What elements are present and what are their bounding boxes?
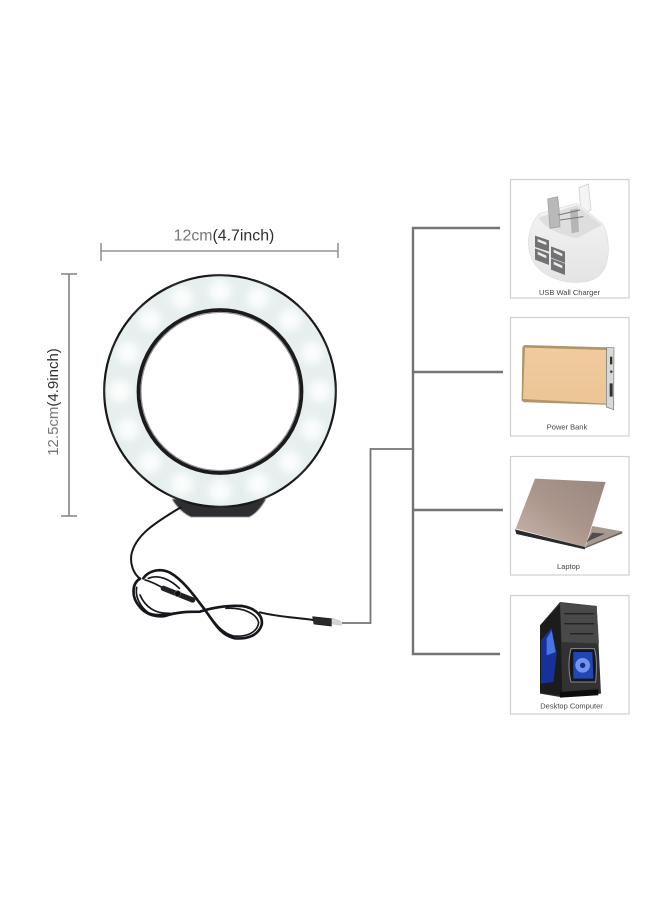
ring light [104,275,336,517]
panel: Laptop [510,456,629,575]
USB plug [313,617,341,626]
label: Laptop [557,562,580,571]
dimension: width 12cm [101,228,338,261]
label: Power Bank [547,422,587,432]
panel: USB Wall Charger [510,180,629,298]
dimension: height 12.5cm: 12.5cm(4.9inch) [45,348,62,456]
ring light base [172,499,266,517]
ring light body [104,275,336,507]
inner ring rim [138,310,302,473]
icon: wall charger [528,184,608,282]
dimension: height 12.5cm [45,274,77,516]
label: Desktop Computer [540,702,603,710]
icon: laptop [515,479,622,549]
panel: Power Bank [510,318,629,436]
LED glow spots [109,280,331,502]
icon: desktop computer tower [540,602,601,698]
inline switch [163,588,193,600]
cable with inline switch and USB plug [131,507,341,638]
label: USB Wall Charger [539,288,600,297]
panel: Desktop Computer [510,596,629,714]
icon: power bank [522,345,614,410]
connector lines [342,228,503,654]
dimension: width 12cm: 12cm(4.7inch) [174,228,274,244]
